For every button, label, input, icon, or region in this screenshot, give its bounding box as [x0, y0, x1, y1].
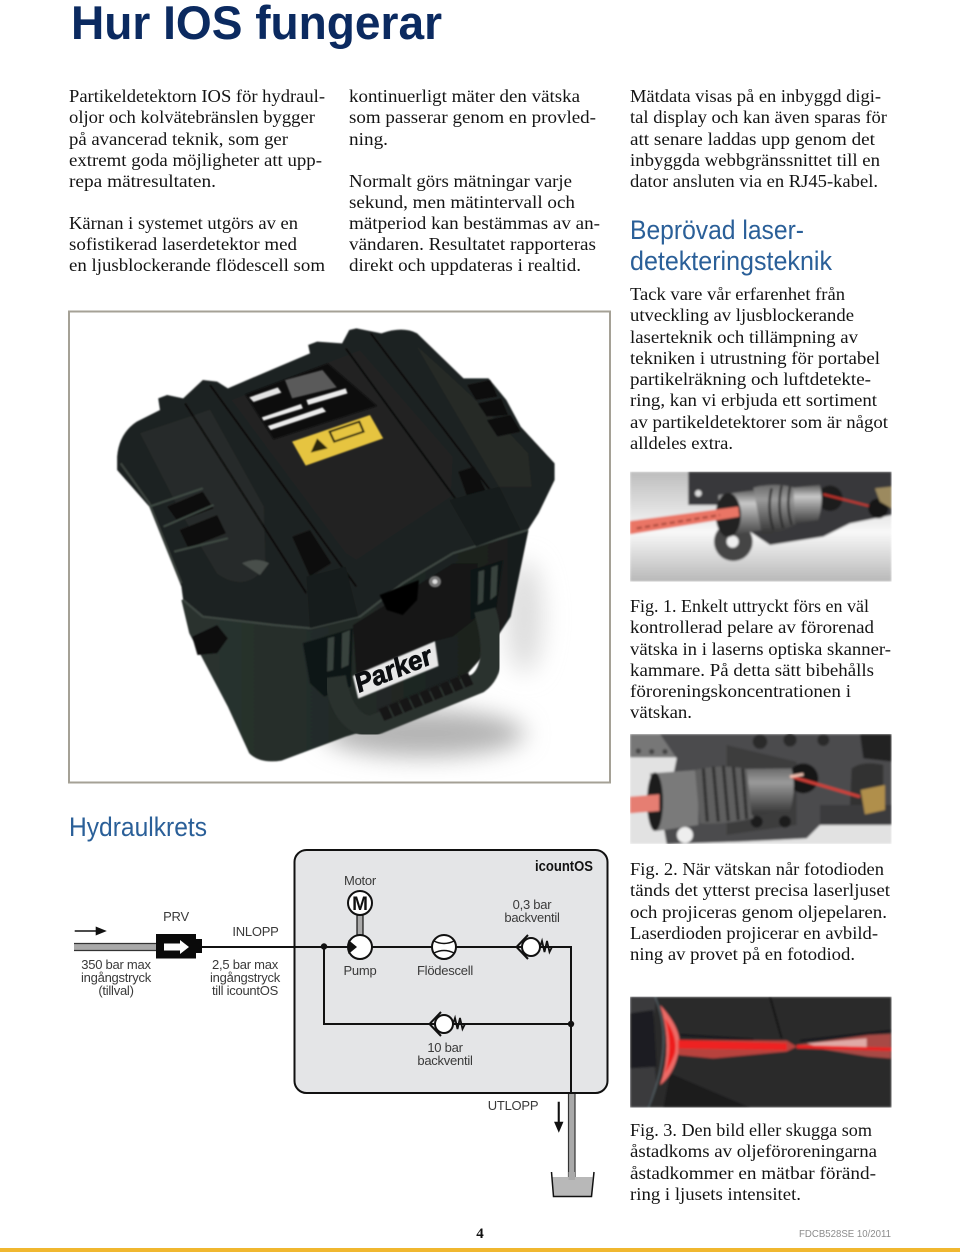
text block: column 3 intro: tal display och kan även sparas för: [630, 107, 887, 127]
case front panel: [353, 563, 478, 677]
text block: column 2: direkt och uppdateras i realtid.: [349, 255, 581, 275]
text block: column 2: som passerar genom en provled-: [349, 107, 596, 127]
laser warning label: [292, 415, 383, 466]
flow cell: [432, 935, 456, 959]
text block: column 1 intro: extremt goda möjligheter att upp-: [69, 150, 322, 170]
caption: Fig 3: Fig. 3. Den bild eller skugga som: [630, 1120, 872, 1140]
diagram labels: Pump: [344, 963, 376, 978]
inlet pipe: [74, 943, 157, 950]
text block: column 3 intro: Mätdata visas på en inbyggd digi-: [630, 86, 881, 106]
caption: Fig 2: Fig. 2. När vätskan når fotodioden: [630, 859, 884, 879]
caption: Fig 3: åstadkoms av oljeföroreningarna: [630, 1141, 877, 1161]
text block: laser paragraph: Tack vare vår erfarenhet från: [630, 284, 845, 304]
lid top highlight: [140, 410, 265, 582]
photo: iCount portable case in frame: Parker: [349, 640, 438, 698]
diagram: hydraulic circuit: [74, 850, 608, 1196]
text block: column 3 intro: att senare laddas upp genom det: [630, 129, 875, 149]
caption: Fig 1: vätska in i laserns optiska skanner-: [630, 639, 891, 659]
photo: Fig 2 laser through threaded nozzle: [630, 733, 892, 844]
lid rim: [183, 530, 528, 628]
text block: column 3 intro: inbyggda webbgränssnittet till en: [630, 150, 880, 170]
caption: Fig 1: vätskan.: [630, 702, 692, 722]
caption: Fig 2: tänds det ytterst precisa laserljuset: [630, 880, 890, 900]
circuit lines: [202, 947, 571, 1094]
outlet pipe: [568, 1094, 575, 1180]
arrow: outlet flow: [554, 1102, 563, 1132]
text block: laser paragraph: utveckling av ljusblockerande: [630, 305, 854, 325]
text block: laser paragraph: alldeles extra.: [630, 433, 733, 453]
text block: laser paragraph: ring, kan vi erbjuda ett sortiment: [630, 390, 877, 410]
text block: column 2: [349, 86, 600, 275]
text block: column 3 intro: dator ansluten via en RJ45-kabel.: [630, 171, 878, 191]
rating plate: [245, 363, 377, 439]
text block: laser paragraph: av partikeldetektorer som är något: [630, 412, 888, 432]
text block: laser paragraph: tekniken i utrustning för portabel: [630, 348, 880, 368]
caption: Fig 1: [630, 596, 891, 722]
diagram labels: UTLOPP: [488, 1098, 538, 1113]
caption: Fig 1: Fig. 1. Enkelt uttryckt förs en väl: [630, 596, 869, 616]
text block: column 1 intro: Partikeldetektorn IOS för hydraul-: [69, 86, 325, 106]
check valve 10 bar: [430, 1012, 465, 1036]
diagram labels: ingångstryck: [81, 970, 152, 985]
caption: Fig 2: Laserdioden projicerar en avbild-: [630, 923, 878, 943]
caption: Fig 1: kontrollerad pelare av förorenad: [630, 617, 874, 637]
motor: M: [352, 894, 368, 915]
junction dots: [321, 943, 574, 1027]
side screw: [192, 625, 228, 655]
diagram labels: Flödescell: [417, 963, 473, 978]
diagram labels: 350 bar max: [81, 957, 152, 972]
diagram labels: ingångstryck: [210, 970, 281, 985]
text block: column 1 intro: repa mätresultaten.: [69, 171, 216, 191]
document code: FDCB528SE 10/2011: [799, 1228, 891, 1240]
caption: Fig 3: [630, 1120, 877, 1204]
text block: column 1 intro: Kärnan i systemet utgörs av en: [69, 213, 298, 233]
text block: column 1 intro: [69, 86, 325, 275]
heading: Hydraulkrets: Hydraulkrets: [69, 812, 207, 842]
caption: Fig 3: ring i ljusets intensitet.: [630, 1184, 801, 1204]
caption: Fig 2: [630, 859, 890, 964]
text block: column 1 intro: på avancerad teknik, som ger: [69, 129, 288, 149]
page number: 4: [476, 1226, 484, 1242]
case body: [181, 530, 529, 761]
text block: column 2: kontinuerligt mäter den vätska: [349, 86, 580, 106]
diagram labels: 10 bar: [427, 1040, 464, 1055]
photo: iCount portable case in frame: [69, 312, 610, 782]
text block: column 2: vändaren. Resultatet rapporteras: [349, 234, 596, 254]
hinge ribs: [467, 380, 521, 437]
caption: Fig 3: åstadkommer en mätbar föränd-: [630, 1163, 876, 1183]
text block: laser paragraph: partikelräkning och luftdetekte-: [630, 369, 871, 389]
gear connector and screw: [335, 576, 492, 727]
caption: Fig 1: föroreningskoncentrationen i: [630, 681, 851, 701]
tank: [552, 1172, 594, 1196]
pump: [348, 935, 372, 959]
label: icountOS: icountOS: [535, 859, 593, 875]
text block: column 2: Normalt görs mätningar varje: [349, 171, 572, 191]
caption: Fig 2: och projiceras genom oljepelaren.: [630, 902, 887, 922]
PRV valve: [156, 934, 202, 958]
photo: Fig 1 laser beam entering nozzle: [630, 472, 892, 582]
diagram labels: INLOPP: [232, 924, 279, 939]
diagram labels: Motor: [344, 873, 377, 888]
heading: Beprövad laserdetekteringsteknik: detekteringsteknik: [630, 246, 832, 276]
check valve 0.3 bar: [516, 935, 552, 959]
caption: Fig 1: kammare. På detta sätt bibehålls: [630, 660, 874, 680]
text block: column 1 intro: sofistikerad laserdetektor med: [69, 234, 297, 254]
carry handle: [335, 610, 492, 727]
diagram labels: 2,5 bar max: [212, 957, 279, 972]
diagram labels: backventil: [504, 910, 560, 925]
diagram labels: till icountOS: [212, 983, 279, 998]
text block: column 1 intro: en ljusblockerande flödescell som: [69, 255, 325, 275]
text block: column 2: ning.: [349, 129, 388, 149]
case lid: [117, 328, 555, 630]
diagram labels: [81, 873, 560, 1113]
text block: laser paragraph: [630, 284, 888, 453]
text block: laser paragraph: laserteknik och tillämpning av: [630, 327, 858, 347]
photo: Fig 3 red light beam on dark background: [630, 997, 892, 1108]
diagram labels: (tillval): [98, 983, 134, 998]
diagram labels: 0,3 bar: [513, 897, 552, 912]
text block: column 3 intro: [630, 86, 887, 191]
latches: [292, 530, 331, 577]
motor: [348, 891, 372, 936]
diagram labels: PRV: [163, 909, 189, 924]
text block: column 2: mätperiod kan bestämmas av an-: [349, 213, 600, 233]
footer bar: [0, 1248, 960, 1252]
Parker logo plate: [353, 641, 439, 699]
caption: Fig 2: ning av provet på en fotodiod.: [630, 944, 855, 964]
panel: icountOS enclosure: [294, 850, 608, 1093]
text block: column 2: sekund, men mätintervall och: [349, 192, 575, 212]
arrow: inlet flow: [75, 927, 106, 935]
heading: Beprövad laserdetekteringsteknik: [630, 215, 832, 276]
diagram labels: backventil: [417, 1053, 473, 1068]
heading: Beprövad laserdetekteringsteknik: Beprövad laser-: [630, 215, 804, 245]
text block: column 1 intro: oljor och kolvätebränslen bygger: [69, 107, 315, 127]
lid straps: [210, 385, 356, 587]
